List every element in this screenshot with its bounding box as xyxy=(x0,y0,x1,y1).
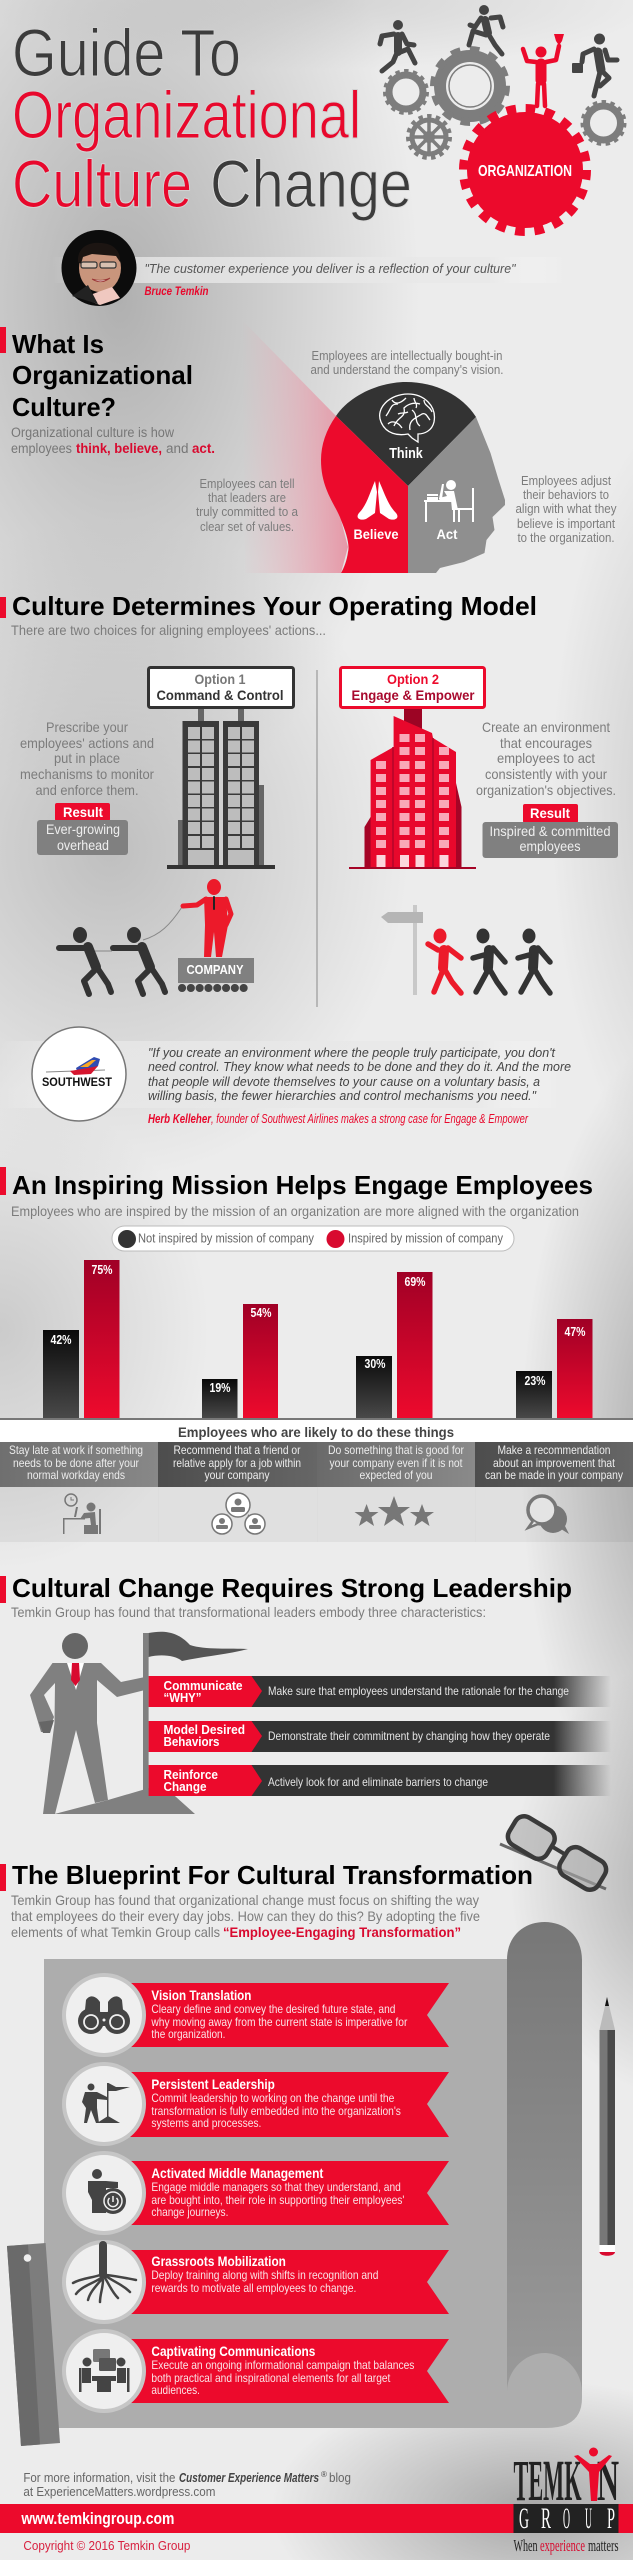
callout: believe: clear set of values. xyxy=(200,519,294,534)
icon: meeting with speech bubbles xyxy=(79,2349,130,2392)
element: activated middle management: Activated Middle Management xyxy=(151,2165,324,2181)
icon: red logo figure xyxy=(574,2448,612,2501)
option 2 result: Inspired & committed xyxy=(490,823,610,839)
option 2 description: employees to act xyxy=(497,750,595,766)
element: persistent leadership xyxy=(62,2062,449,2146)
legend: Not inspired by mission of company xyxy=(138,1232,315,1246)
GROUP wordmark xyxy=(519,2502,615,2535)
heading: What Is xyxy=(12,329,104,359)
element: activated middle management: Engage middle managers so that they understand, and xyxy=(151,2180,401,2194)
figure: man with briefcase xyxy=(572,34,617,96)
icon: clock and desk xyxy=(63,1494,101,1534)
gray spoked gear xyxy=(408,116,450,158)
icon: ruler xyxy=(7,2243,60,2446)
icon: glasses xyxy=(500,1813,610,1893)
quote: Bruce Temkin xyxy=(52,230,565,306)
characteristic: communicate why xyxy=(149,1676,611,1707)
option 1 result: Ever-growing xyxy=(46,821,120,837)
characteristic: communicate why: Communicate xyxy=(164,1678,242,1693)
option 1 sign: Command & Control xyxy=(156,687,284,703)
characteristic: model desired behaviors xyxy=(149,1721,611,1752)
characteristic: model desired behaviors: Model Desired xyxy=(164,1722,245,1737)
pink light beam xyxy=(242,320,348,573)
option 2 description: that encourages xyxy=(500,735,592,751)
icon: plane xyxy=(46,1057,105,1075)
icon: speech bubbles xyxy=(528,1496,569,1534)
behavior column: good for company: expected of you xyxy=(360,1468,432,1482)
head: believe segment xyxy=(321,416,408,573)
callout: act: align with what they xyxy=(516,501,617,516)
attribution: Herb Kelleher xyxy=(148,1112,212,1126)
rope xyxy=(95,907,182,951)
element: grassroots mobilization: rewards to motivate all employees to change. xyxy=(151,2281,356,2295)
icon: praying hands xyxy=(358,481,397,520)
attribution xyxy=(148,1112,529,1126)
panel: strong leadership xyxy=(0,1573,611,1814)
option 2 description: Create an environment xyxy=(482,719,610,735)
gray gear large xyxy=(434,50,506,122)
footer note xyxy=(23,2470,351,2499)
behavior column: improvement xyxy=(475,1442,633,1487)
figure: runner left xyxy=(380,20,415,71)
intro text xyxy=(11,1892,480,1940)
characteristic: reinforce change xyxy=(149,1765,611,1796)
legend xyxy=(112,1226,514,1251)
option 1 description: put in place xyxy=(54,750,120,766)
legend: Inspired by mission of company xyxy=(348,1232,504,1246)
figure: dark walker two xyxy=(518,928,550,993)
footer note: at ExperienceMatters.wordpress.com xyxy=(23,2484,215,2499)
GROUP wordmark: O xyxy=(563,2502,570,2535)
title: Change xyxy=(210,147,412,222)
behavior column: good for company: Do something that is good for xyxy=(328,1443,464,1457)
chart caption band: Employees who are likely to do these things xyxy=(178,1424,454,1440)
company platform: COMPANY xyxy=(186,962,244,977)
figure: red winner with trophy xyxy=(523,34,564,106)
section marker xyxy=(0,1864,6,1891)
behavior column: good for company: your company even if it is not xyxy=(330,1456,463,1470)
option 1 result: overhead xyxy=(57,837,109,853)
hill xyxy=(54,1788,195,1814)
bar chart: 69% xyxy=(404,1274,426,1289)
callout: act: Employees adjust xyxy=(521,473,611,488)
red building xyxy=(349,716,476,869)
center divider xyxy=(316,670,318,1007)
behavior column: stay late: Stay late at work if something xyxy=(9,1443,143,1457)
icon: brain xyxy=(380,394,434,442)
callout: believe: that leaders are xyxy=(208,490,286,505)
callout: act: to the organization. xyxy=(518,530,614,545)
behavior column: stay late: normal workday ends xyxy=(27,1468,125,1482)
behavior column: recommend: relative apply for a job within xyxy=(173,1456,301,1470)
heading xyxy=(12,329,193,422)
logo: Temkin Group: P xyxy=(607,2502,615,2535)
figure: dark walker one xyxy=(473,928,505,993)
element: persistent leadership: systems and processes. xyxy=(151,2116,261,2130)
company platform xyxy=(178,958,254,988)
behavior column: stay late xyxy=(0,1442,158,1487)
intro text xyxy=(11,425,215,456)
quote text xyxy=(148,1045,571,1103)
bar chart: 75% xyxy=(92,1262,113,1277)
quote text: "If you create an environment where the people truly participate, you don't xyxy=(148,1045,556,1060)
illustration: leader with flag xyxy=(30,1632,248,1814)
characteristic: communicate why: Make sure that employees understand the rationale for the change xyxy=(268,1684,569,1698)
icon: manager with power button xyxy=(88,2169,126,2214)
characteristic: model desired behaviors: Behaviors xyxy=(164,1734,220,1749)
characteristic: reinforce change: Change xyxy=(164,1779,206,1794)
intro text: elements of what Temkin Group calls xyxy=(11,1924,220,1940)
quote text: willing basis, the fewer hierarchies and control mechanisms you need." xyxy=(148,1088,537,1103)
panel: what is organizational culture xyxy=(0,320,617,573)
characteristic: communicate why: “WHY” xyxy=(164,1690,202,1705)
portrait photo xyxy=(62,230,136,306)
GROUP wordmark: R xyxy=(541,2502,551,2535)
footer bar with website xyxy=(0,2504,633,2533)
option 2 result xyxy=(482,804,618,858)
heading: Organizational xyxy=(12,360,193,390)
title: Culture xyxy=(12,147,192,222)
head: think segment xyxy=(336,382,476,486)
callout: think: and understand the company's vision. xyxy=(310,362,504,377)
element: vision translation xyxy=(62,1973,449,2057)
option 2 result: Result xyxy=(530,805,570,821)
option 1 description: Prescribe your xyxy=(46,719,128,735)
option 1 description: employees' actions and xyxy=(20,735,154,751)
copyright: Copyright © 2016 Temkin Group xyxy=(23,2538,190,2553)
intro text: and xyxy=(166,441,188,456)
callout: act xyxy=(516,473,617,545)
bar chart: 30% xyxy=(364,1356,386,1371)
panel: inspiring mission xyxy=(0,1167,633,1542)
quote text: need control. They know what needs to be done and they do it. And the more xyxy=(148,1059,571,1074)
bar chart: 23% xyxy=(524,1373,546,1388)
subheading: Employees who are inspired by the mission of an organization are more aligned with the organization xyxy=(11,1203,579,1219)
option 2 sign xyxy=(340,668,484,732)
bar chart: 54% xyxy=(250,1305,272,1320)
intro text: think, believe, xyxy=(76,441,162,456)
section marker xyxy=(0,597,6,618)
tagline: experience xyxy=(540,2536,585,2555)
option 1 sign xyxy=(148,668,294,722)
heading: The Blueprint For Cultural Transformation xyxy=(12,1860,533,1890)
figure: red boss xyxy=(183,879,231,957)
blueprint sheet xyxy=(44,1922,582,2428)
heading: An Inspiring Mission Helps Engage Employees xyxy=(12,1170,593,1200)
icon: referral network xyxy=(212,1493,265,1534)
element: grassroots mobilization: Deploy training along with shifts in recognition and xyxy=(151,2268,378,2282)
icon: leader with flag xyxy=(82,2083,130,2123)
footer note: blog xyxy=(329,2470,351,2485)
red organization gear xyxy=(464,109,586,231)
gray towers building xyxy=(167,721,275,869)
subheading: Temkin Group has found that transformational leaders embody three characteristics: xyxy=(11,1604,486,1620)
bar chart xyxy=(43,1260,592,1419)
tagline: When xyxy=(514,2536,538,2555)
heading: Culture? xyxy=(12,392,116,422)
icon: binoculars xyxy=(78,1996,130,2034)
element: captivating communications: Execute an ongoing informational campaign that balances xyxy=(151,2358,414,2372)
element: vision translation: the organization. xyxy=(151,2027,225,2041)
option 2 description: consistently with your xyxy=(485,766,607,782)
element: persistent leadership: transformation is fully embedded into the organization's xyxy=(151,2104,401,2118)
section marker xyxy=(0,1576,6,1603)
callout: believe: truly committed to a xyxy=(196,504,299,519)
behavior column: recommend: Recommend that a friend or xyxy=(174,1443,300,1457)
behavior column: recommend xyxy=(158,1442,317,1487)
callout: believe: Employees can tell xyxy=(200,476,295,491)
red organization gear: ORGANIZATION xyxy=(478,163,572,180)
intro text: employees xyxy=(11,441,72,456)
behavior column: recommend: your company xyxy=(204,1468,270,1482)
gears and climbing figures illustration xyxy=(380,5,624,231)
attribution: , founder of Southwest Airlines makes a strong case for Engage & Empower xyxy=(211,1112,529,1126)
footer note: For more information, visit the xyxy=(23,2470,175,2485)
element: vision translation: Cleary define and convey the desired future state, and xyxy=(151,2002,395,2016)
gray gear left xyxy=(386,72,426,112)
quote text: that people will devote themselves to your cause on a voluntary basis, a xyxy=(148,1074,540,1089)
element: vision translation: Vision Translation xyxy=(151,1987,251,2003)
flag xyxy=(143,1632,248,1790)
heading: Culture Determines Your Operating Model xyxy=(12,591,537,621)
behavior column: stay late: needs to be done after your xyxy=(13,1456,139,1470)
quote: Herb Kelleher of Southwest xyxy=(0,1027,571,1126)
intro text: that employees do their every day jobs. How can they do this? By adopting the five xyxy=(11,1908,480,1924)
footer note: ® xyxy=(321,2470,327,2479)
characteristic: reinforce change: Actively look for and eliminate barriers to change xyxy=(268,1775,488,1789)
head: think segment: Think xyxy=(389,446,424,462)
element: activated middle management: change journeys. xyxy=(151,2205,228,2219)
head: act segment: Act xyxy=(436,526,458,542)
footer note: Customer Experience Matters xyxy=(179,2470,319,2485)
behavior column: improvement: Make a recommendation xyxy=(498,1443,610,1457)
element: grassroots mobilization xyxy=(62,2240,449,2324)
logo: Temkin Group xyxy=(514,2448,619,2555)
logo: Southwest circle: SOUTHWEST xyxy=(42,1075,113,1089)
element: vision translation: why moving away from the current state is imperative for xyxy=(151,2015,407,2029)
head: believe segment: Believe xyxy=(354,526,399,542)
element: captivating communications xyxy=(62,2329,449,2413)
element: activated middle management xyxy=(62,2151,449,2235)
title xyxy=(12,16,412,222)
GROUP wordmark: U xyxy=(585,2502,592,2535)
option 2 sign: Engage & Empower xyxy=(352,687,475,703)
behavior column: improvement: about an improvement that xyxy=(493,1456,616,1470)
panel: culture determines operating model xyxy=(0,591,618,1007)
gray gear right xyxy=(583,102,624,144)
icon row background xyxy=(0,1487,633,1542)
element: captivating communications: Captivating Communications xyxy=(151,2343,316,2359)
intro text: Temkin Group has found that organizational change must focus on shifting the way xyxy=(11,1892,479,1908)
subheading: There are two choices for aligning employees' actions... xyxy=(11,622,326,638)
option 2 description xyxy=(476,719,616,798)
option 1 sign: Option 1 xyxy=(194,671,246,687)
characteristic: reinforce change: Reinforce xyxy=(164,1767,218,1782)
option 1 result xyxy=(37,803,128,855)
bar chart: 19% xyxy=(210,1380,231,1395)
option 2 description: organization's objectives. xyxy=(476,782,616,798)
head: act segment xyxy=(408,417,505,573)
heading: Cultural Change Requires Strong Leadership xyxy=(12,1573,572,1603)
option 1 description: and enforce them. xyxy=(36,782,138,798)
element: activated middle management: are bought into, their role in supporting their employees' xyxy=(151,2193,404,2207)
logo: Southwest circle xyxy=(32,1027,126,1121)
option 2 sign: Option 2 xyxy=(387,671,439,687)
title: Organizational xyxy=(12,78,361,153)
icon: tree roots xyxy=(73,2245,136,2302)
bar chart: 47% xyxy=(564,1324,586,1339)
quote: Bruce Temkin: "The customer experience you deliver is a reflection of your culture" xyxy=(144,261,517,276)
figure: leader xyxy=(30,1633,145,1814)
section marker xyxy=(0,1167,6,1195)
element: captivating communications: audiences. xyxy=(151,2383,200,2397)
chart caption band xyxy=(0,1418,633,1442)
illustration: boss pulling employees xyxy=(59,879,254,994)
footer bar with website: www.temkingroup.com xyxy=(21,2509,174,2528)
icon: person at desk xyxy=(424,480,474,522)
element: persistent leadership: Commit leadership to working on the change until the xyxy=(151,2091,395,2105)
icon: three stars xyxy=(354,1496,434,1526)
figure: employee one xyxy=(59,927,111,994)
callout: believe xyxy=(196,476,299,534)
characteristic: model desired behaviors: Demonstrate their commitment by changing how they operate xyxy=(268,1729,550,1743)
intro text: act. xyxy=(192,441,215,456)
illustration: leader walking with employees xyxy=(381,905,550,995)
element: grassroots mobilization: Grassroots Mobilization xyxy=(151,2253,286,2269)
intro text: “Employee-Engaging Transformation” xyxy=(223,1924,461,1940)
signpost xyxy=(381,905,423,995)
GROUP wordmark: G xyxy=(519,2502,529,2535)
panel: blueprint for cultural transformation xyxy=(0,1860,615,2446)
option 1 description xyxy=(20,719,154,798)
option 2 result: employees xyxy=(520,838,580,854)
callout: act: believe is important xyxy=(517,516,615,531)
figure: runner top xyxy=(469,5,503,54)
option 1 result: Result xyxy=(63,804,103,820)
callout: think xyxy=(310,348,504,377)
icon: pencil xyxy=(600,1997,615,2256)
callout: act: their behaviors to xyxy=(523,487,609,502)
element: captivating communications: both practical and inspirational elements for all target xyxy=(151,2371,391,2385)
section marker xyxy=(0,327,6,353)
option 1 description: mechanisms to monitor xyxy=(20,766,154,782)
bar chart: 42% xyxy=(50,1332,72,1347)
callout: think: Employees are intellectually bought-in xyxy=(312,348,502,363)
element: persistent leadership: Persistent Leadership xyxy=(151,2076,275,2092)
quote: Bruce Temkin: Bruce Temkin xyxy=(144,284,208,298)
behavior column: good for company xyxy=(317,1442,475,1487)
title: Guide To xyxy=(12,16,241,91)
intro text: Organizational culture is how xyxy=(11,425,174,440)
figure: red walker xyxy=(428,928,461,993)
figure: employee two xyxy=(113,927,165,994)
